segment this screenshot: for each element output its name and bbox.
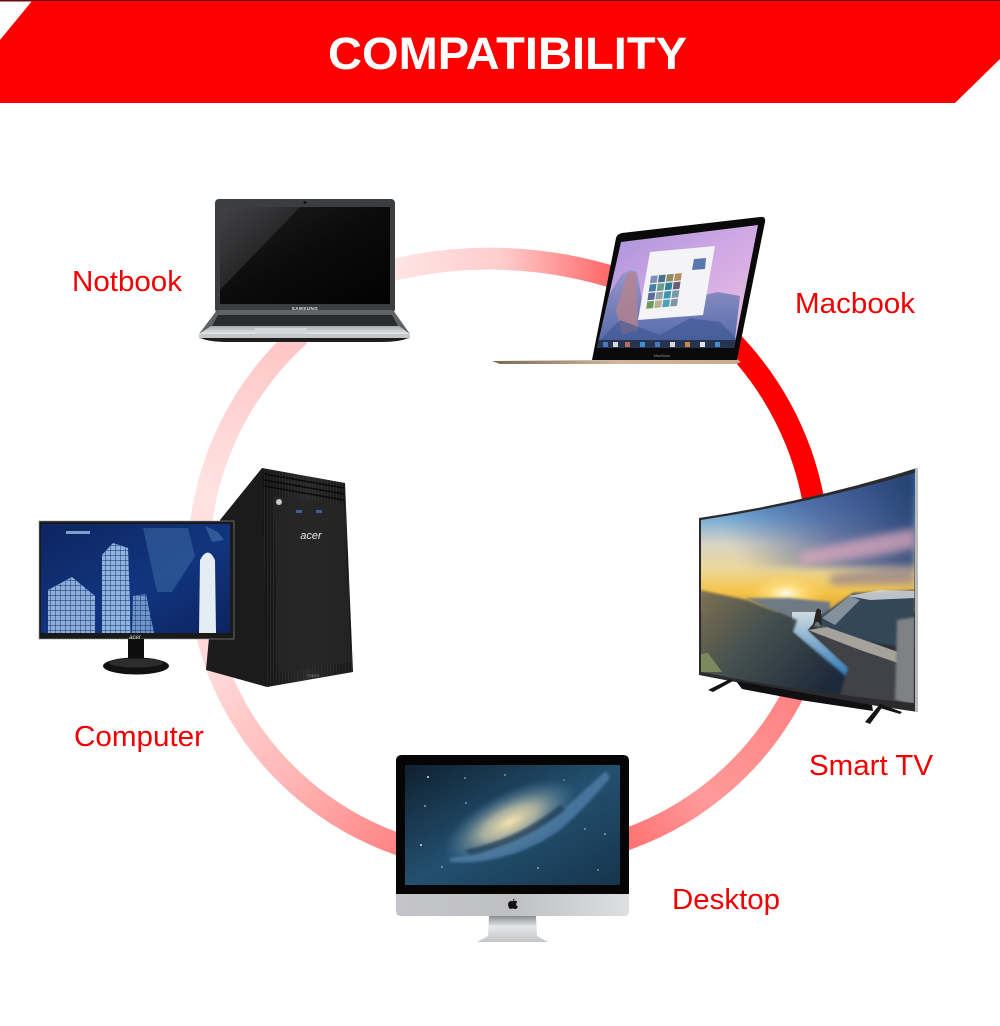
valley far — [745, 598, 830, 630]
device: smart tv — [699, 468, 918, 724]
foreground rock — [700, 590, 848, 695]
connecting ring — [199, 259, 815, 848]
far mountains — [815, 590, 915, 650]
header banner — [0, 0, 1000, 103]
cliff — [808, 627, 898, 705]
label: smart tv: Smart TV — [809, 750, 934, 782]
stand legs — [708, 679, 733, 692]
device: desktop computer — [39, 468, 353, 687]
brand text: acer — [300, 530, 323, 542]
model text: Aspire — [307, 673, 320, 678]
title: COMPATIBILITY — [328, 28, 687, 79]
soundbar — [736, 681, 873, 711]
label: macbook: Macbook — [795, 288, 916, 320]
brand text: MacBook — [654, 353, 670, 358]
apple logo — [508, 898, 518, 909]
river — [792, 612, 850, 680]
brand text: SAMSUNG — [292, 306, 318, 311]
monitor — [39, 521, 234, 674]
label: desktop: Desktop — [672, 884, 780, 916]
dock — [603, 342, 720, 347]
label: notbook: Notbook — [72, 266, 183, 298]
device: notebook laptop — [199, 199, 410, 342]
pc tower — [206, 468, 353, 687]
device: macbook — [492, 217, 765, 364]
thumbnail grid — [646, 273, 682, 309]
label: computer: Computer — [74, 721, 204, 753]
brand text: acer — [129, 635, 142, 641]
device: imac desktop — [396, 755, 629, 942]
